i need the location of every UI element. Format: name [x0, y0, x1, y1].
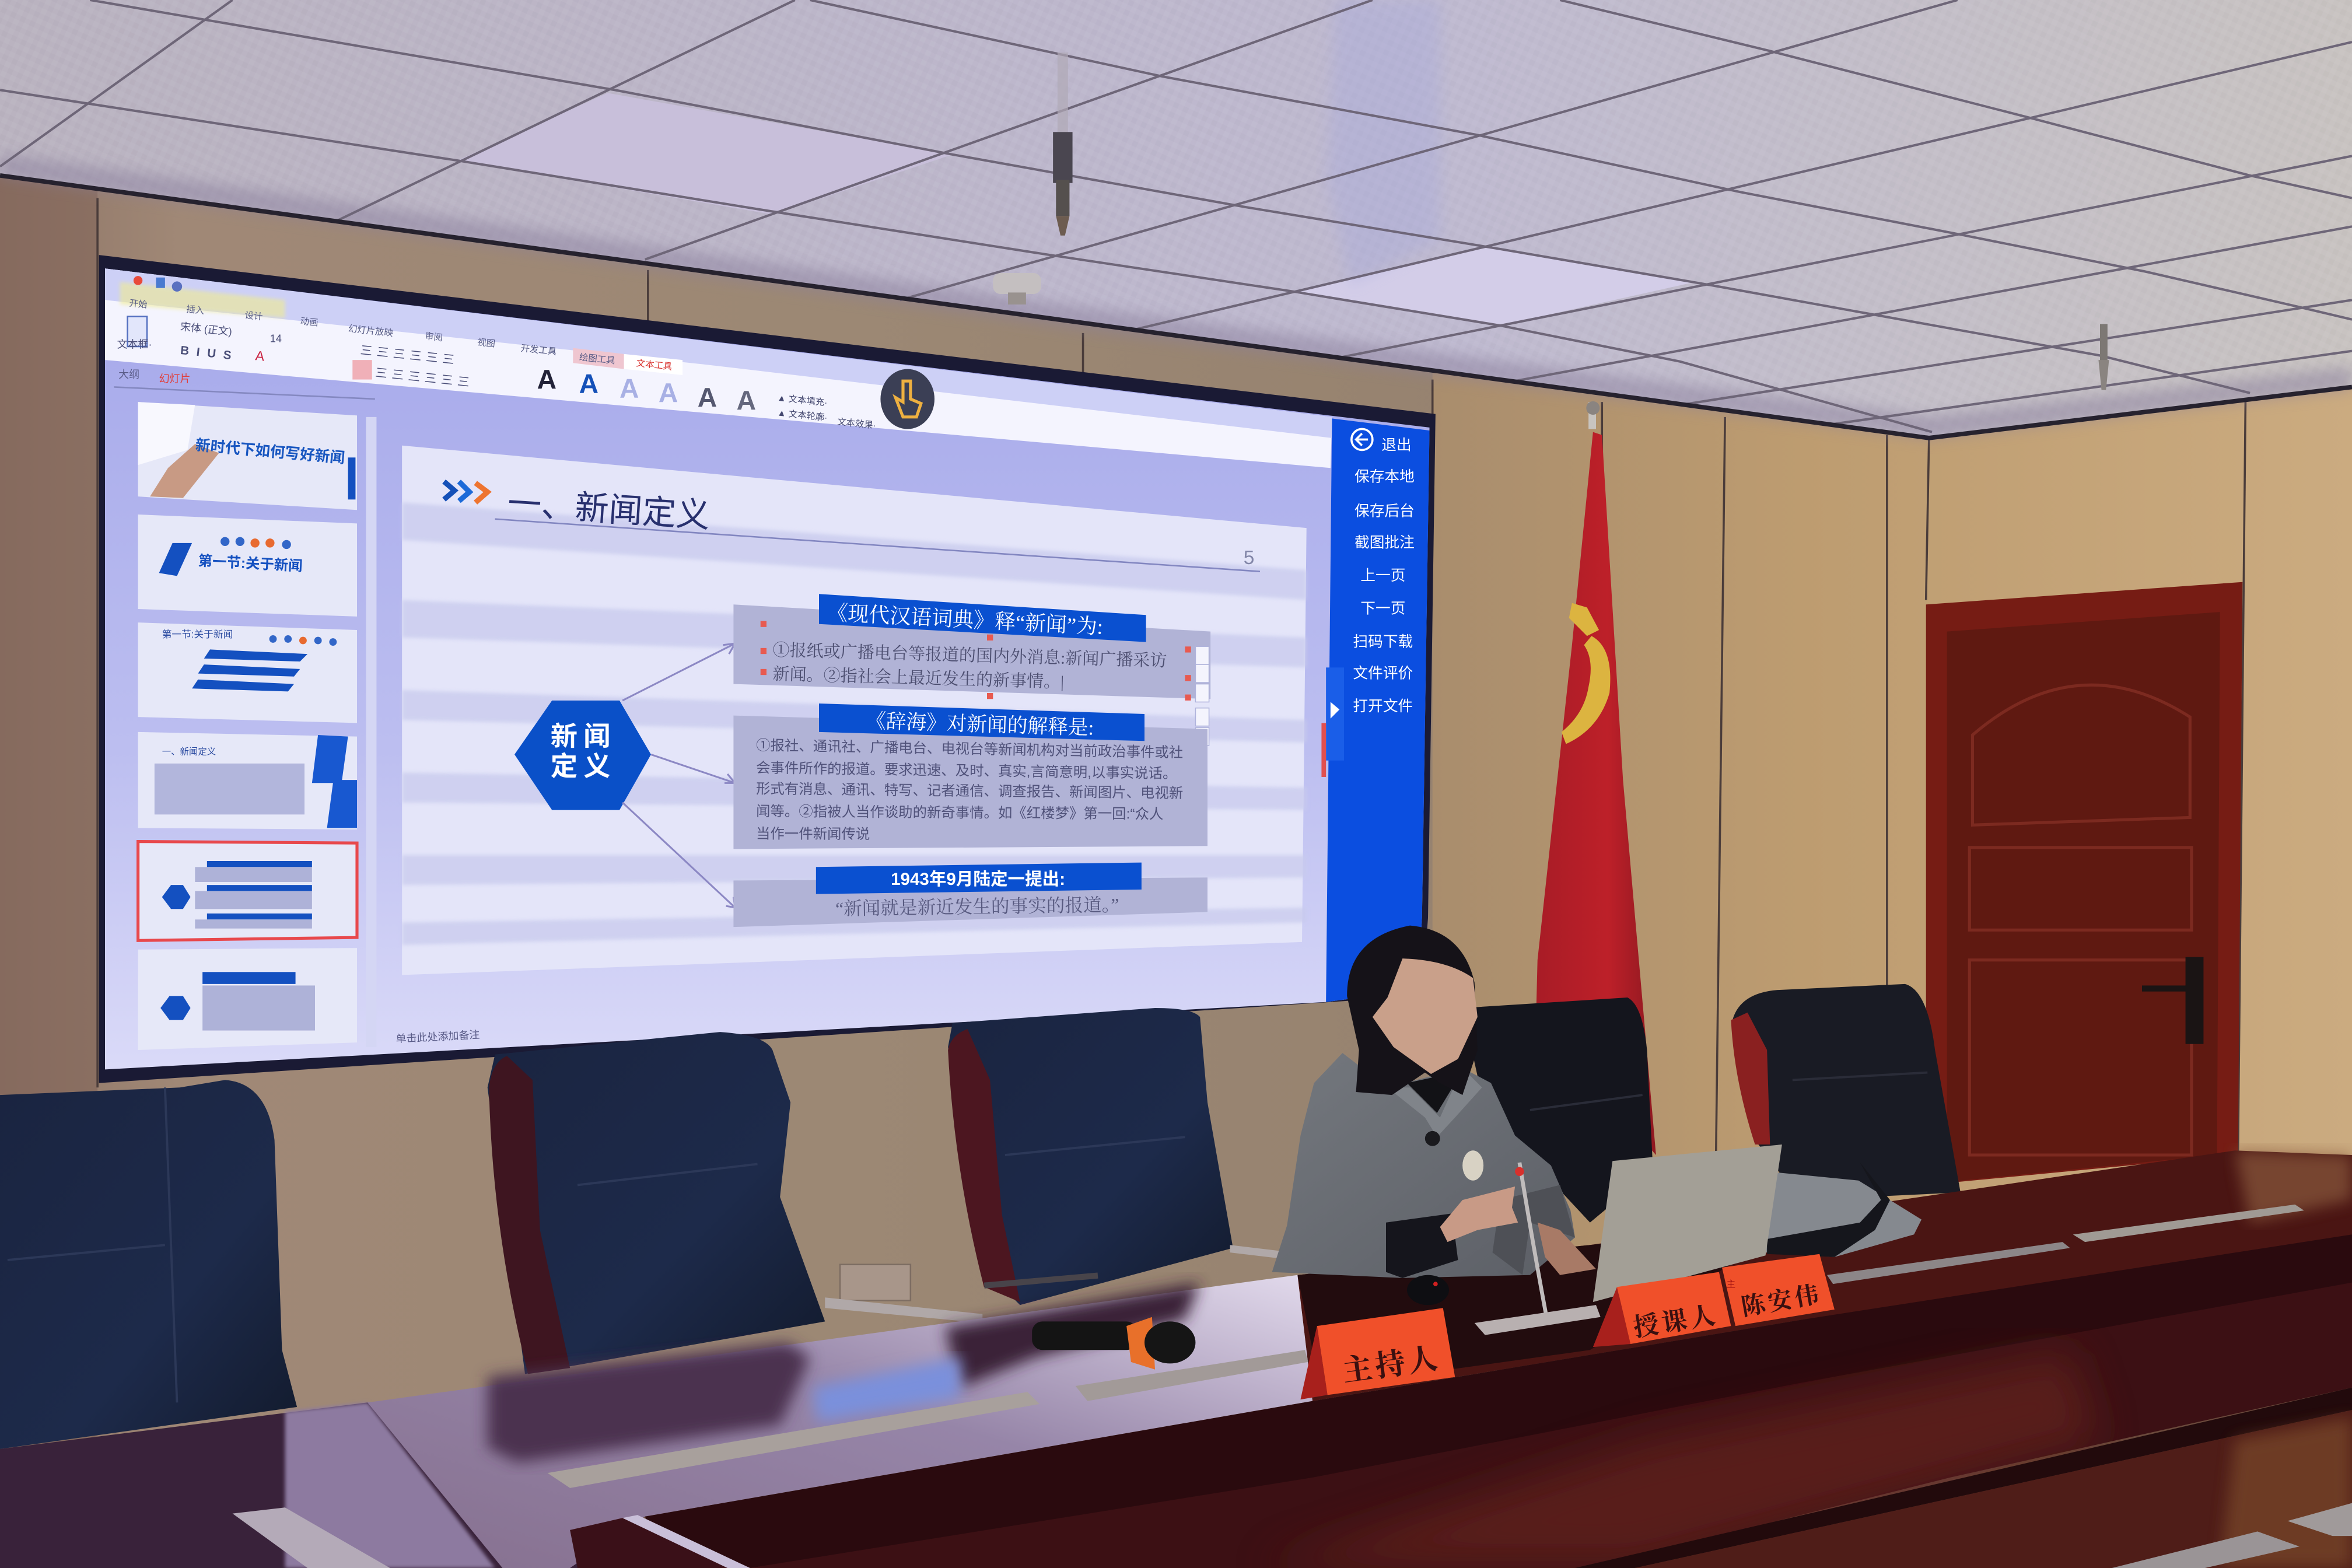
ribbon text effects: 文本效果·: [836, 416, 877, 431]
collapse tab: [1321, 667, 1344, 777]
ribbon tabs: 动画: [300, 316, 318, 328]
outline tabs: [114, 369, 375, 399]
definition 3 box: “新闻就是新近发生的事实的报道。”: [835, 895, 1119, 919]
sleeve cuff: [1386, 1213, 1458, 1278]
definition 2 box: 会事件所作的报道。要求迅速、及时、真实,言简意明,以事实说话。: [756, 760, 1177, 782]
arrow to definition 3: [622, 803, 735, 908]
definition 2 box: 形式有消息、通讯、特写、记者通信、调查报告、新闻图片、电视新: [756, 781, 1183, 802]
notes placeholder: 单击此处添加备注: [396, 1029, 480, 1045]
ribbon text style samples: A: [620, 373, 639, 403]
ribbon font controls: [117, 317, 474, 390]
sidebar menu: 保存后台: [1354, 503, 1415, 520]
table control strip 2: [1076, 1350, 1308, 1401]
chair 3: [948, 1008, 1293, 1305]
hexagon badge: 新闻: [551, 721, 617, 751]
blue glow on ceiling: [1328, 0, 1440, 285]
ceiling sprinkler right: [2098, 324, 2109, 390]
selection handles: [761, 621, 1191, 701]
name plate: lecturer: [1593, 1272, 1731, 1347]
ribbon tabs: [129, 298, 682, 375]
ribbon text style samples: A: [737, 385, 756, 415]
wall outlet: [840, 1265, 911, 1300]
left hand: [1440, 1186, 1518, 1242]
ribbon tabs: 插入: [186, 304, 205, 316]
light band left: [285, 1402, 495, 1568]
ribbon tabs: 文本工具: [636, 358, 673, 372]
definition 2 box: 当作一件新闻传说: [756, 826, 870, 842]
slide thumbnails: [138, 402, 357, 1050]
table control strip 4: [2073, 1205, 2304, 1242]
thumbnail 5 selected: [138, 842, 357, 940]
slide: [402, 446, 1307, 975]
definition 1 box: 新闻。②指社会上最近发生的新事情。|: [772, 664, 1064, 692]
arrow to definition 2: [651, 754, 735, 783]
name plate: Chen Anwei: 陈安伟: [1740, 1280, 1824, 1321]
computer mouse: [1407, 1275, 1449, 1305]
speaker: [1272, 926, 1596, 1278]
table control strip 7: [2287, 1503, 2352, 1536]
brooch: [1462, 1150, 1483, 1181]
definition 3 box: 1943年9月陆定一提出:: [891, 870, 1065, 889]
shadow by wall: [0, 165, 2352, 428]
glare right: [2235, 1150, 2352, 1223]
coat button: [1425, 1131, 1440, 1146]
sidebar menu: 退出: [1381, 436, 1412, 453]
bag: [1766, 1163, 1922, 1257]
ceiling smoke detector: [993, 273, 1041, 304]
handheld microphone: [1032, 1317, 1195, 1370]
ribbon font controls: 三三三三三三: [360, 344, 460, 368]
flag: [1536, 401, 1656, 1155]
ribbon font controls: A: [255, 348, 265, 364]
near table plane: [1635, 1410, 2352, 1568]
ribbon tabs: 绘图工具: [579, 352, 615, 366]
ribbon text effects: [777, 393, 877, 431]
right hand: [1538, 1223, 1596, 1275]
outline tabs: 幻灯片: [159, 373, 191, 385]
sidebar menu: 打开文件: [1353, 698, 1413, 715]
ribbon font controls: 14: [270, 332, 282, 344]
ribbon tabs: 设计: [244, 310, 263, 322]
thumbnail 4: [138, 732, 357, 830]
thumbnail scrollbar: [366, 417, 376, 1047]
ribbon text effects: ▲ 文本填充·: [777, 393, 828, 408]
ribbon tabs: 审阅: [424, 331, 443, 343]
table surface left: [0, 1402, 600, 1568]
ribbon text effects: ▲ 文本轮廓·: [777, 407, 828, 423]
name plate: host: [1300, 1308, 1455, 1399]
ribbon font controls: BIUS: [180, 344, 239, 363]
gooseneck microphone: [1475, 1163, 1601, 1335]
definition 2 box: 闻等。②指被人当作谈助的新奇事情。如《红楼梦》第一回:“众人: [756, 804, 1163, 822]
hammer and sickle: [1562, 603, 1610, 744]
thumbnail 6: [138, 948, 357, 1050]
ceiling grid: [0, 0, 2352, 432]
dark area near speaker: [1297, 1223, 1800, 1388]
table control strip 1: [548, 1392, 1040, 1488]
shiny table centre: [368, 1275, 1312, 1568]
ribbon text style samples: A: [698, 382, 717, 412]
page number: 5: [1244, 547, 1254, 569]
chair 1: [0, 1080, 297, 1449]
chair 4 behind speaker: [1462, 998, 1653, 1223]
sidebar menu: 文件评价: [1353, 664, 1413, 681]
lower rail: [1575, 1388, 2352, 1568]
inner table plane: [750, 1283, 2352, 1568]
chair 5: [1731, 984, 1961, 1200]
thumbnail 3: [138, 622, 357, 723]
table control strip 6: [2112, 1531, 2300, 1568]
hexagon badge: [514, 701, 651, 810]
collar: [1388, 1068, 1482, 1137]
right blue sidebar: [1321, 418, 1430, 1002]
ceiling: [0, 0, 2352, 438]
near glare: [2220, 1418, 2352, 1567]
ribbon tabs: 开始: [129, 298, 148, 310]
ribbon font controls: 三三三三三三: [374, 366, 474, 390]
hair: [1347, 926, 1478, 1095]
door panels: [1969, 685, 2192, 1155]
floating tools: [1195, 646, 1209, 746]
turtleneck: [1407, 1071, 1462, 1113]
chair 2: [488, 1032, 982, 1374]
quick access icons: [134, 276, 182, 292]
definition 1 box: 《现代汉语词典》释“新闻”为:: [826, 601, 1104, 639]
name plate: host: 主持人: [1340, 1342, 1443, 1388]
table control strip 3: [1827, 1242, 2070, 1284]
door: [1926, 582, 2242, 1185]
ribbon toolbar: [105, 268, 1332, 468]
ribbon tabs: 幻灯片放映: [348, 323, 394, 338]
ribbon tabs: 开发工具: [520, 343, 557, 357]
slide title: 一、新闻定义: [506, 485, 711, 535]
conference table: [0, 1150, 2352, 1568]
yellow smudge: [120, 282, 285, 318]
inner table glare: [1260, 1350, 2100, 1567]
face: [1373, 958, 1478, 1074]
table control strip 5: [233, 1507, 390, 1568]
name plate: lecturer: 授课人: [1632, 1301, 1720, 1342]
ceiling sprinkler left: [1053, 52, 1073, 236]
hexagon badge: 定义: [551, 751, 617, 781]
definition 1 box: ①报纸或广播电台等报道的国内外消息:新闻广播采访: [772, 640, 1167, 671]
ribbon text style samples: A: [537, 364, 556, 394]
coat: [1272, 1053, 1575, 1278]
ribbon font controls: 宋体 (正文): [180, 321, 233, 338]
outline tabs: 大纲: [118, 369, 139, 380]
definition 2 box: ①报社、通讯社、广播电台、电视台等新闻机构对当前政治事件或社: [756, 738, 1183, 761]
sidebar menu: 下一页: [1360, 601, 1405, 617]
title underline: [495, 519, 1260, 572]
sidebar menu: 扫码下载: [1353, 633, 1413, 650]
sidebar menu: [1353, 436, 1415, 715]
thumbnail 3: 第一节:关于新闻: [162, 629, 233, 640]
name plate: Chen Anwei: [1722, 1254, 1835, 1326]
ribbon font controls: 文本框·: [117, 339, 152, 351]
definition 2 box: 《辞海》对新闻的解释是:: [865, 709, 1094, 739]
thumbnail 4: 一、新闻定义: [162, 746, 216, 757]
thumbnail 2: [138, 514, 357, 617]
chair reflection dark 2: [945, 1283, 1200, 1388]
sidebar menu: 保存本地: [1354, 468, 1415, 485]
screen display: [105, 268, 1430, 1069]
sidebar menu: 上一页: [1360, 567, 1405, 584]
front rail: [645, 1234, 2352, 1568]
ribbon text style samples: A: [579, 369, 598, 399]
blue reflection: [813, 1357, 960, 1422]
door handle: [2142, 957, 2203, 1044]
title chevrons: [444, 481, 488, 502]
bright tile right: [1290, 246, 1695, 326]
chair reflection: [488, 1342, 810, 1462]
bright tile left: [457, 93, 953, 215]
ribbon text style samples: A: [659, 377, 678, 408]
hand pointer button: [880, 369, 935, 429]
arrow to definition 1: [622, 643, 735, 701]
definition 1 box: [733, 594, 1210, 699]
second sleeve: [1493, 1185, 1575, 1275]
thumbnail 1: 新时代下如何写好新闻: [195, 437, 345, 467]
moire stripes: [402, 502, 1307, 945]
table surface far right: [1297, 1150, 2352, 1401]
corner highlight: [622, 1515, 750, 1568]
laptop: [1593, 1144, 1782, 1302]
definition 3 box: [733, 863, 1208, 927]
corner frame: [570, 1518, 750, 1568]
ribbon text style samples: [537, 364, 756, 415]
thumbnail 2: 第一节:关于新闻: [198, 553, 303, 575]
sidebar menu: 截图批注: [1354, 534, 1415, 551]
ribbon tabs: 视图: [477, 337, 496, 349]
name plate: Chen Anwei: 主: [1727, 1279, 1735, 1289]
exit icon: [1352, 429, 1373, 450]
thumbnail 1: [138, 402, 357, 510]
definition 2 box: [733, 704, 1208, 849]
projection screen frame: [99, 255, 1436, 1083]
